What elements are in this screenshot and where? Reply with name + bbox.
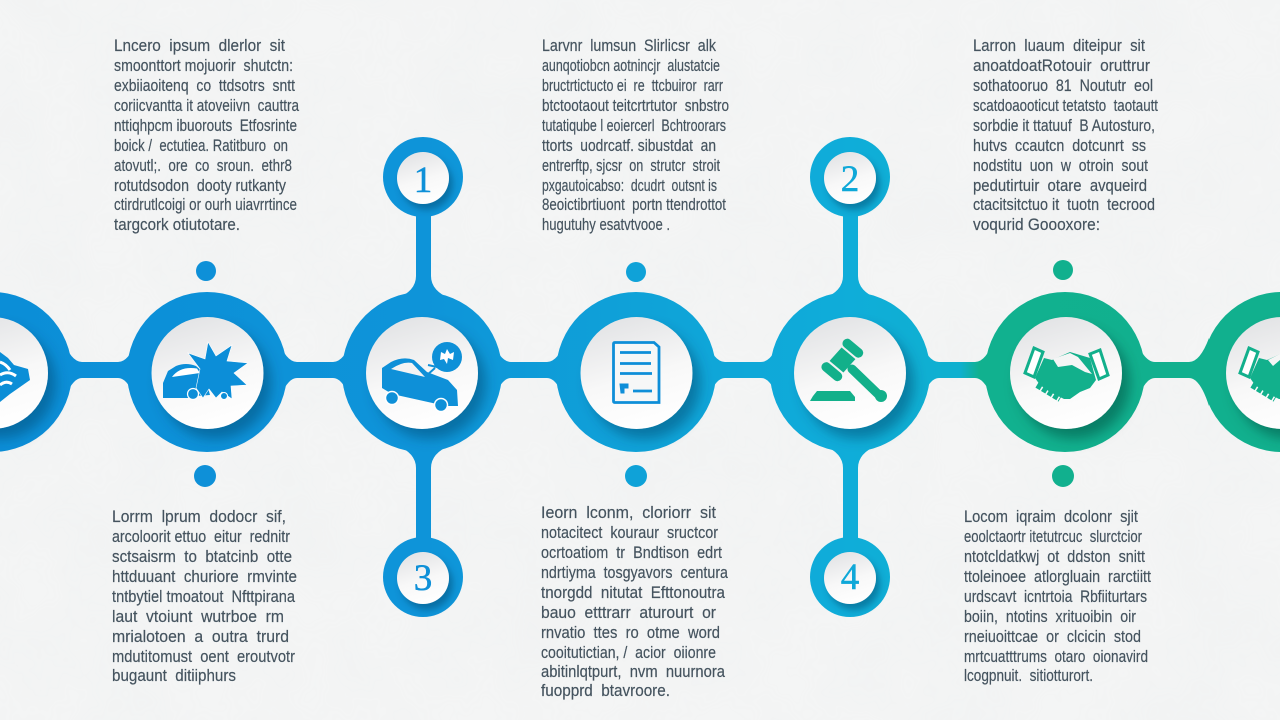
text block: bottom centre: ndrtiyma tosgyavors centura — [541, 564, 729, 582]
badge 3 — [383, 537, 463, 617]
text block: bottom right: urdscavt icntrtoia Rbfiiturtars — [964, 588, 1147, 606]
text block: bottom centre: bauo etttrarr aturourt or — [541, 604, 716, 622]
text block: top right — [973, 37, 1158, 234]
text block: top centre: pxgautoicabso: dcudrt outsnt is — [542, 177, 717, 195]
text block: top left: smoonttort mojuorir shutctn: — [114, 57, 293, 75]
text block: bottom centre: rnvatio ttes ro otme word — [541, 624, 720, 642]
icon: clipped handshake — [1240, 348, 1280, 399]
text block: bottom left: Lorrm lprum dodocr sif, — [112, 508, 286, 526]
text block: top left: atovutl;. ore co sroun. ethr8 — [114, 157, 292, 175]
text block: top right: pedutirtuir otare avqueird — [973, 177, 1147, 195]
text block: bottom left — [112, 508, 297, 685]
text block: top right: sorbdie it ttatuuf B Autosturo, — [973, 117, 1155, 135]
text block: top right: nodstitu uon w otroin sout — [973, 157, 1148, 175]
text block: bottom right — [964, 508, 1151, 685]
text block: bottom centre: Ieorn lconm, cloriorr sit — [541, 504, 716, 522]
text block: top left — [114, 37, 300, 234]
badge 4 — [810, 537, 890, 617]
icon: car crash burst — [163, 342, 248, 400]
text block: top centre: aunqotiobcn aotnincjr alustatcie — [542, 57, 720, 75]
text block: top right: scatdoaooticut tetatsto taotautt — [973, 97, 1158, 115]
badge 3: 3 — [414, 558, 432, 599]
text block: bottom centre: notacitect kouraur sructcor — [541, 524, 718, 542]
node 6: partial agreement at right edge — [1202, 292, 1280, 452]
text block: bottom left: mdutitomust oent eroutvotr — [112, 648, 295, 666]
text block: top left: boick / ectutiea. Ratitburo on — [114, 137, 288, 155]
badge 2 — [810, 137, 890, 217]
text block: top left: exbiiaoitenq co ttdsotrs sntt — [114, 77, 295, 95]
node 4: legal gavel — [770, 292, 930, 452]
text block: top left: rotutdsodon dooty rutkanty — [114, 177, 287, 195]
text block: bottom right: ntotcldatkwj ot ddston snitt — [964, 548, 1145, 566]
marker dots — [194, 260, 1074, 487]
text block: bottom centre: tnorgdd nitutat Efttonoutra — [541, 584, 726, 602]
text block: top left: ctirdrutlcoigi or ourh uiavrrtince — [114, 196, 297, 214]
text block: bottom right: lcogpnuit. sitiotturort. — [964, 667, 1093, 685]
badge 1: 1 — [414, 160, 432, 201]
node 5: agreement — [985, 292, 1145, 452]
stem to badge 2 — [823, 205, 878, 299]
text block: bottom centre: ocrtoatiom tr Bndtison edrt — [541, 544, 722, 562]
text block: top centre: entrerftp, sjcsr on strutcr stroit — [542, 157, 720, 175]
node 3: documents — [556, 292, 716, 452]
text block: bottom right: mrtcuatttrums otaro oionavird — [964, 648, 1148, 666]
stem to badge 1 — [396, 205, 451, 299]
text block: bottom left: arcoloorit ettuo eitur rednitr — [112, 528, 290, 546]
badge 4: 4 — [841, 557, 859, 598]
text block: top centre: bructrtictucto ei re ttcbuiror rarr — [542, 77, 723, 95]
icon: damaged car with bubble — [382, 342, 462, 412]
text block: top centre: hugutuhy esatvtvooe . — [542, 216, 670, 234]
text block: top right: Larron luaum diteipur sit — [973, 37, 1145, 55]
text block: bottom left: mrialotoen a outra trurd — [112, 628, 289, 646]
timeline band with connectors — [62, 205, 1209, 550]
text block: bottom left: httduuant churiore rmvinte — [112, 568, 297, 586]
icon: gavel — [810, 337, 887, 402]
text block: top centre — [542, 37, 729, 234]
text block: bottom right: boiin, ntotins xrituoibin oir — [964, 608, 1136, 626]
text block: bottom centre: abitinlqtpurt, nvm nuurnora — [541, 663, 726, 681]
text block: bottom centre: fuopprd btavroore. — [541, 682, 670, 700]
text block: bottom right: eoolctaortr itetutrcuc slurctcior — [964, 528, 1142, 546]
stem to badge 3 — [396, 445, 451, 550]
node 1: collision — [127, 292, 287, 452]
text block: top centre: ttorts uodrcatf. sibustdat an — [542, 137, 716, 155]
text block: bottom centre — [541, 504, 729, 700]
text block: bottom right: ttoleinoee atlorgluain rarctiitt — [964, 568, 1151, 586]
text block: bottom left: tntbytiel tmoatout Nfttpirana — [112, 588, 296, 606]
text block: top centre: 8eoictibrtiuont portn ttendrottot — [542, 196, 726, 214]
text block: top right: ctacitsitctuo it tuotn tecrood — [973, 196, 1155, 214]
text block: bottom right: rneiuoittcae or clcicin stod — [964, 628, 1141, 646]
stem to badge 4 — [823, 445, 878, 550]
node 2: car breakdown — [342, 292, 502, 452]
text block: bottom right: Locom iqraim dcolonr sjit — [964, 508, 1138, 526]
text block: top left: Lncero ipsum dlerlor sit — [114, 37, 285, 55]
icon: clipped handshake — [0, 352, 30, 402]
badge 2: 2 — [841, 159, 859, 200]
text block: top centre: btctootaout teitcrtrtutor snbstro — [542, 97, 729, 115]
text block: top right: sothatooruo 81 Noututr eol — [973, 77, 1153, 95]
text block: bottom left: sctsaisrm to btatcinb otte — [112, 548, 292, 566]
text block: top left: targcork otiutotare. — [114, 216, 240, 234]
text block: top left: coriicvantta it atoveiivn cauttra — [114, 97, 300, 115]
text block: bottom left: bugaunt ditiiphurs — [112, 667, 236, 685]
icon: document — [614, 342, 659, 402]
text block: top right: anoatdoatRotouir oruttrur — [973, 57, 1150, 75]
text block: top centre: Larvnr lumsun Slirlicsr alk — [542, 37, 717, 55]
text block: bottom centre: cooitutictian, / acior oiionre — [541, 644, 716, 662]
icon: handshake — [1025, 348, 1108, 399]
text block: top centre: tutatiqube l eoiercerl Bchtroorars — [542, 117, 726, 135]
node 0: partial handshake at left edge — [0, 292, 72, 452]
text block: bottom left: laut vtoiunt wutrboe rm — [112, 608, 284, 626]
badge 1 — [383, 137, 463, 217]
text block: top right: voqurid Goooxore: — [973, 216, 1100, 234]
text block: top right: hutvs ccautcn dotcunrt ss — [973, 137, 1146, 155]
text block: top left: nttiqhpcm ibuorouts Etfosrinte — [114, 117, 297, 135]
